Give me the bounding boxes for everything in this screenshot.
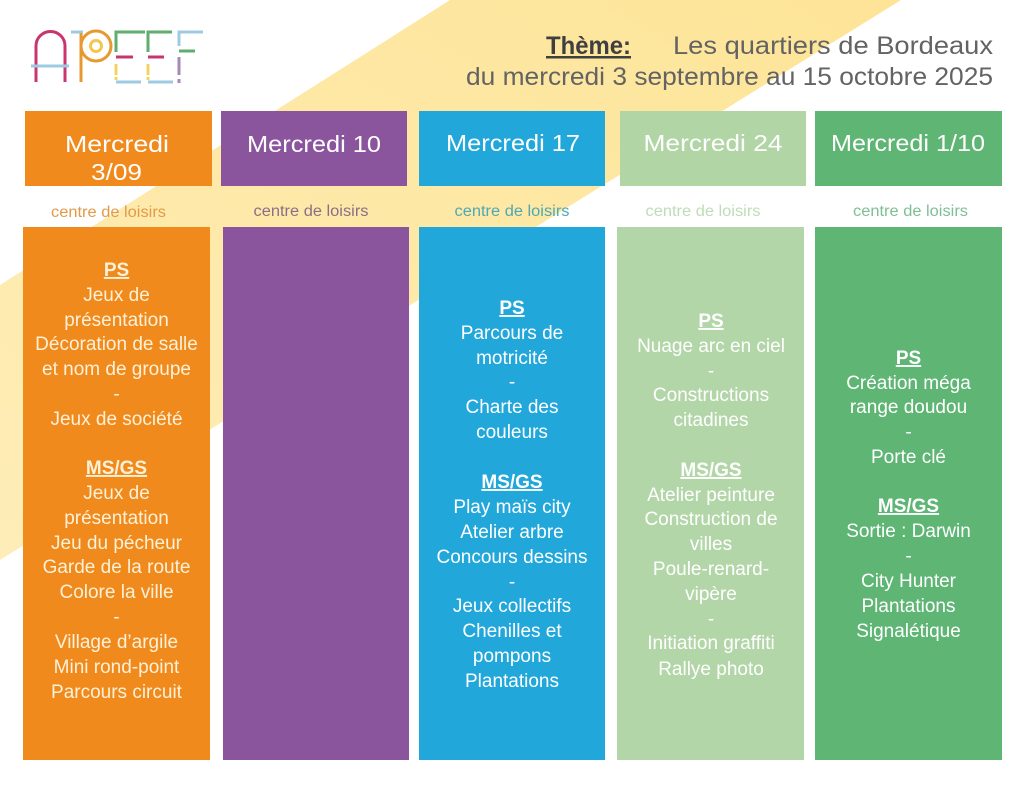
panel: activities 24: citadines: [674, 410, 748, 431]
panel: activities 3/09: [23, 227, 210, 760]
panel: activities 3/09: Parcours circuit: [51, 682, 183, 703]
panel: activities 1/10: City Hunter: [861, 571, 957, 592]
logo: APEEF: [31, 31, 203, 83]
panel: activities 17: couleurs: [476, 422, 548, 443]
panel: activities 3/09: Garde de la route: [43, 557, 190, 578]
label: centre de loisirs: centre de loisirs: [646, 203, 761, 220]
header: Mercredi 17: [419, 111, 605, 186]
panel: activities 1/10: Porte clé: [871, 447, 946, 468]
header: Mercredi 3/09: [25, 111, 212, 186]
panel: activities 24: [617, 227, 804, 760]
column: Mercredi 17: [419, 111, 605, 760]
label: centre de loisirs: centre de loisirs: [454, 203, 570, 220]
header: Mercredi 10: [221, 111, 407, 186]
panel: activities 24: MS/GS: [680, 460, 742, 481]
panel: activities 1/10: Plantations: [861, 596, 956, 617]
panel: activities 3/09: présentation: [64, 508, 169, 529]
panel: activities 3/09: PS: [104, 260, 129, 281]
panel: activities 1/10: Sortie : Darwin: [846, 521, 971, 542]
panel: activities 3/09: Jeu du pécheur: [51, 533, 183, 554]
panel: activities 24: Nuage arc en ciel: [637, 336, 785, 357]
panel: activities 24: Poule-renard-: [653, 559, 769, 580]
header: Mercredi 17: Mercredi 17: [446, 130, 580, 156]
column: Mercredi 24: [617, 111, 806, 760]
panel: activities 3/09: Jeux de société: [50, 409, 183, 430]
column: Mercredi 1/10: [815, 111, 1002, 760]
panel: activities 17: Charte des: [466, 397, 558, 418]
panel: activities 1/10: PS: [896, 348, 921, 369]
panel: activities 24: Constructions: [653, 385, 769, 406]
panel: activities 17: -: [509, 372, 515, 393]
panel: activities 1/10: Création méga: [846, 373, 971, 394]
panel: activities 17: MS/GS: [481, 472, 543, 493]
panel: activities 17: Chenilles et: [462, 621, 562, 642]
panel: activities 24: -: [708, 609, 714, 630]
header: Mercredi 1/10: Mercredi 1/10: [831, 130, 985, 156]
panel: activities 3/09: Mini rond-point: [54, 657, 180, 678]
panel: activities 24: Atelier peinture: [647, 485, 775, 506]
panel: activities 3/09: présentation: [64, 310, 169, 331]
panel: activities 1/10: -: [905, 546, 912, 567]
header: Mercredi 3/09: Mercredi: [65, 131, 169, 157]
label: centre de loisirs: centre de loisirs: [254, 203, 369, 220]
panel: activities 17: [419, 227, 605, 760]
panel: activities 3/09: -: [113, 607, 120, 628]
panel: activities 3/09: Jeux de: [83, 285, 150, 306]
panel: activities 3/09: MS/GS: [86, 458, 147, 479]
title: du mercredi 3 septembre au 15 octobre 2025: [466, 63, 993, 91]
panel: activities 24: Construction de: [644, 509, 778, 530]
panel: activities 17: PS: [499, 298, 525, 319]
panel: activities 3/09: Jeux de: [83, 483, 150, 504]
header: Mercredi 10: Mercredi 10: [247, 131, 381, 157]
panel: activities 3/09: Décoration de salle: [35, 334, 198, 355]
panel: activities 1/10: -: [905, 422, 912, 443]
panel: activities 17: Parcours de: [461, 323, 563, 344]
panel: activities 3/09: -: [113, 384, 120, 405]
title: Thème:: [546, 32, 631, 60]
title: Les quartiers de Bordeaux: [673, 32, 994, 60]
panel: activities 1/10: MS/GS: [878, 496, 939, 517]
panel: activities 24: Rallye photo: [658, 659, 764, 680]
panel: activities 17: Jeux collectifs: [453, 596, 571, 617]
panel: activities 1/10: [815, 227, 1002, 760]
panel: activities 3/09: Village d’argile: [55, 632, 178, 653]
column: Mercredi 3/09: [23, 111, 212, 760]
panel: activities 24: -: [708, 361, 714, 382]
panel: activities 17: Plantations: [465, 671, 559, 692]
panel: activities 17: -: [509, 572, 515, 593]
panel: activities 24: vipère: [685, 584, 737, 605]
header: Mercredi 3/09: 3/09: [91, 159, 142, 185]
panel: activities 17: Concours dessins: [436, 547, 588, 568]
header: Mercredi 24: [620, 111, 806, 186]
background diagonal band: [0, 0, 901, 560]
label: centre de loisirs: centre de loisirs: [51, 204, 166, 221]
panel: activities 1/10: Signalétique: [856, 621, 961, 642]
panel: activities 17: Play maïs city: [453, 497, 571, 518]
panel: empty purple column: [223, 227, 409, 760]
column: Mercredi 10: [221, 111, 409, 760]
panel: activities 17: motricité: [476, 348, 548, 369]
header: Mercredi 1/10: [815, 111, 1002, 186]
panel: activities 24: Initiation graffiti: [647, 633, 775, 654]
panel: activities 24: villes: [690, 534, 732, 555]
title: [466, 32, 994, 91]
panel: activities 24: PS: [698, 311, 724, 332]
label: centre de loisirs: centre de loisirs: [853, 203, 968, 220]
panel: activities 3/09: Colore la ville: [59, 582, 174, 603]
panel: activities 17: pompons: [473, 646, 551, 667]
header: Mercredi 24: Mercredi 24: [644, 130, 783, 156]
panel: activities 1/10: range doudou: [850, 397, 967, 418]
panel: activities 3/09: et nom de groupe: [42, 359, 191, 380]
panel: activities 17: Atelier arbre: [460, 522, 564, 543]
